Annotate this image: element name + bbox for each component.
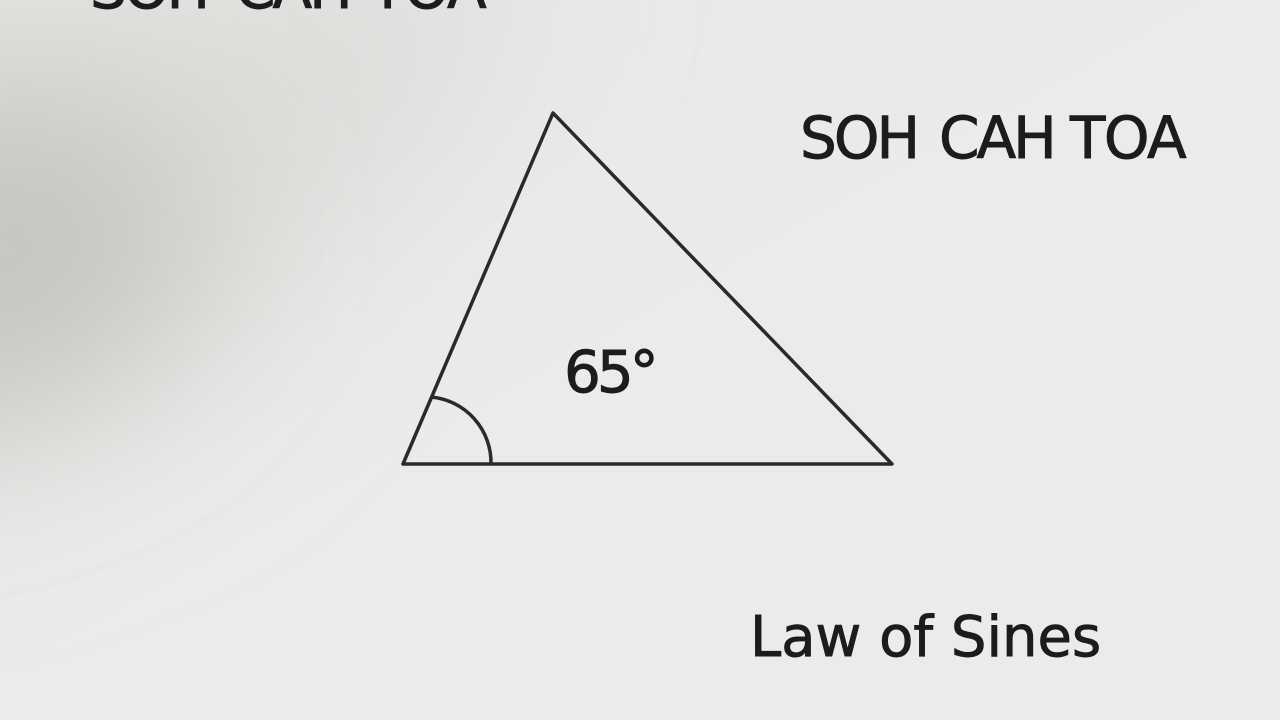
heading: SOH CAH TOA: TOA (1070, 104, 1185, 172)
cropped top heading (90, 0, 487, 22)
heading: SOH CAH TOA: CAH (939, 104, 1054, 172)
label: Law of Sines: Law of Sines (750, 605, 1101, 670)
heading: SOH CAH TOA (800, 104, 1187, 172)
angle arc (431, 397, 491, 464)
triangle outline (403, 113, 892, 464)
triangle diagram (401, 111, 894, 466)
heading: SOH CAH TOA: SOH (800, 104, 917, 172)
angle label: 65° (564, 338, 655, 406)
